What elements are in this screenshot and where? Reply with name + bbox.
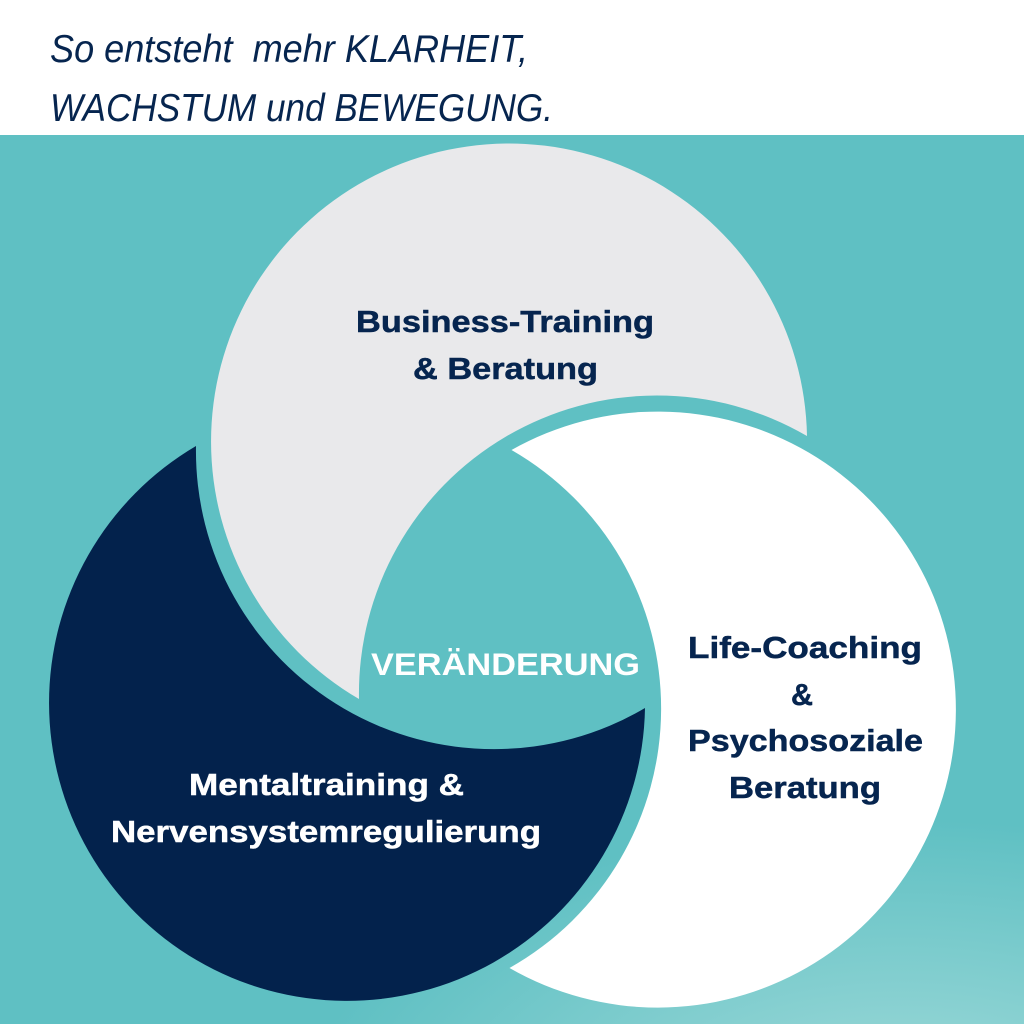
label: Business-Training: Business-Training	[356, 304, 654, 339]
label: Life-Coaching: &	[791, 677, 813, 712]
label: Mentaltraining	[111, 767, 541, 849]
title	[50, 28, 553, 130]
label: Life-Coaching: Beratung	[729, 770, 881, 805]
label: Business-Training	[356, 304, 654, 386]
title: WACHSTUM und BEWEGUNG.	[50, 87, 553, 130]
label: Mentaltraining: Nervensystemregulierung	[111, 814, 541, 849]
segment: Mentaltraining & Nervensystemregulierung	[49, 446, 645, 1001]
segment: Business-Training & Beratung	[211, 144, 807, 699]
center label: VERÄNDERUNG	[371, 646, 640, 682]
label: Life-Coaching: Life-Coaching	[688, 630, 922, 665]
title: So entsteht mehr KLARHEIT,	[50, 28, 528, 71]
label: Business-Training: & Beratung	[413, 351, 598, 386]
header background	[0, 0, 1024, 135]
label: Life-Coaching	[688, 630, 923, 805]
label: Life-Coaching: Psychosoziale	[688, 723, 923, 758]
label: Mentaltraining: Mentaltraining &	[189, 767, 464, 802]
segment: Life-Coaching & Psychosoziale Beratung	[510, 412, 956, 1008]
